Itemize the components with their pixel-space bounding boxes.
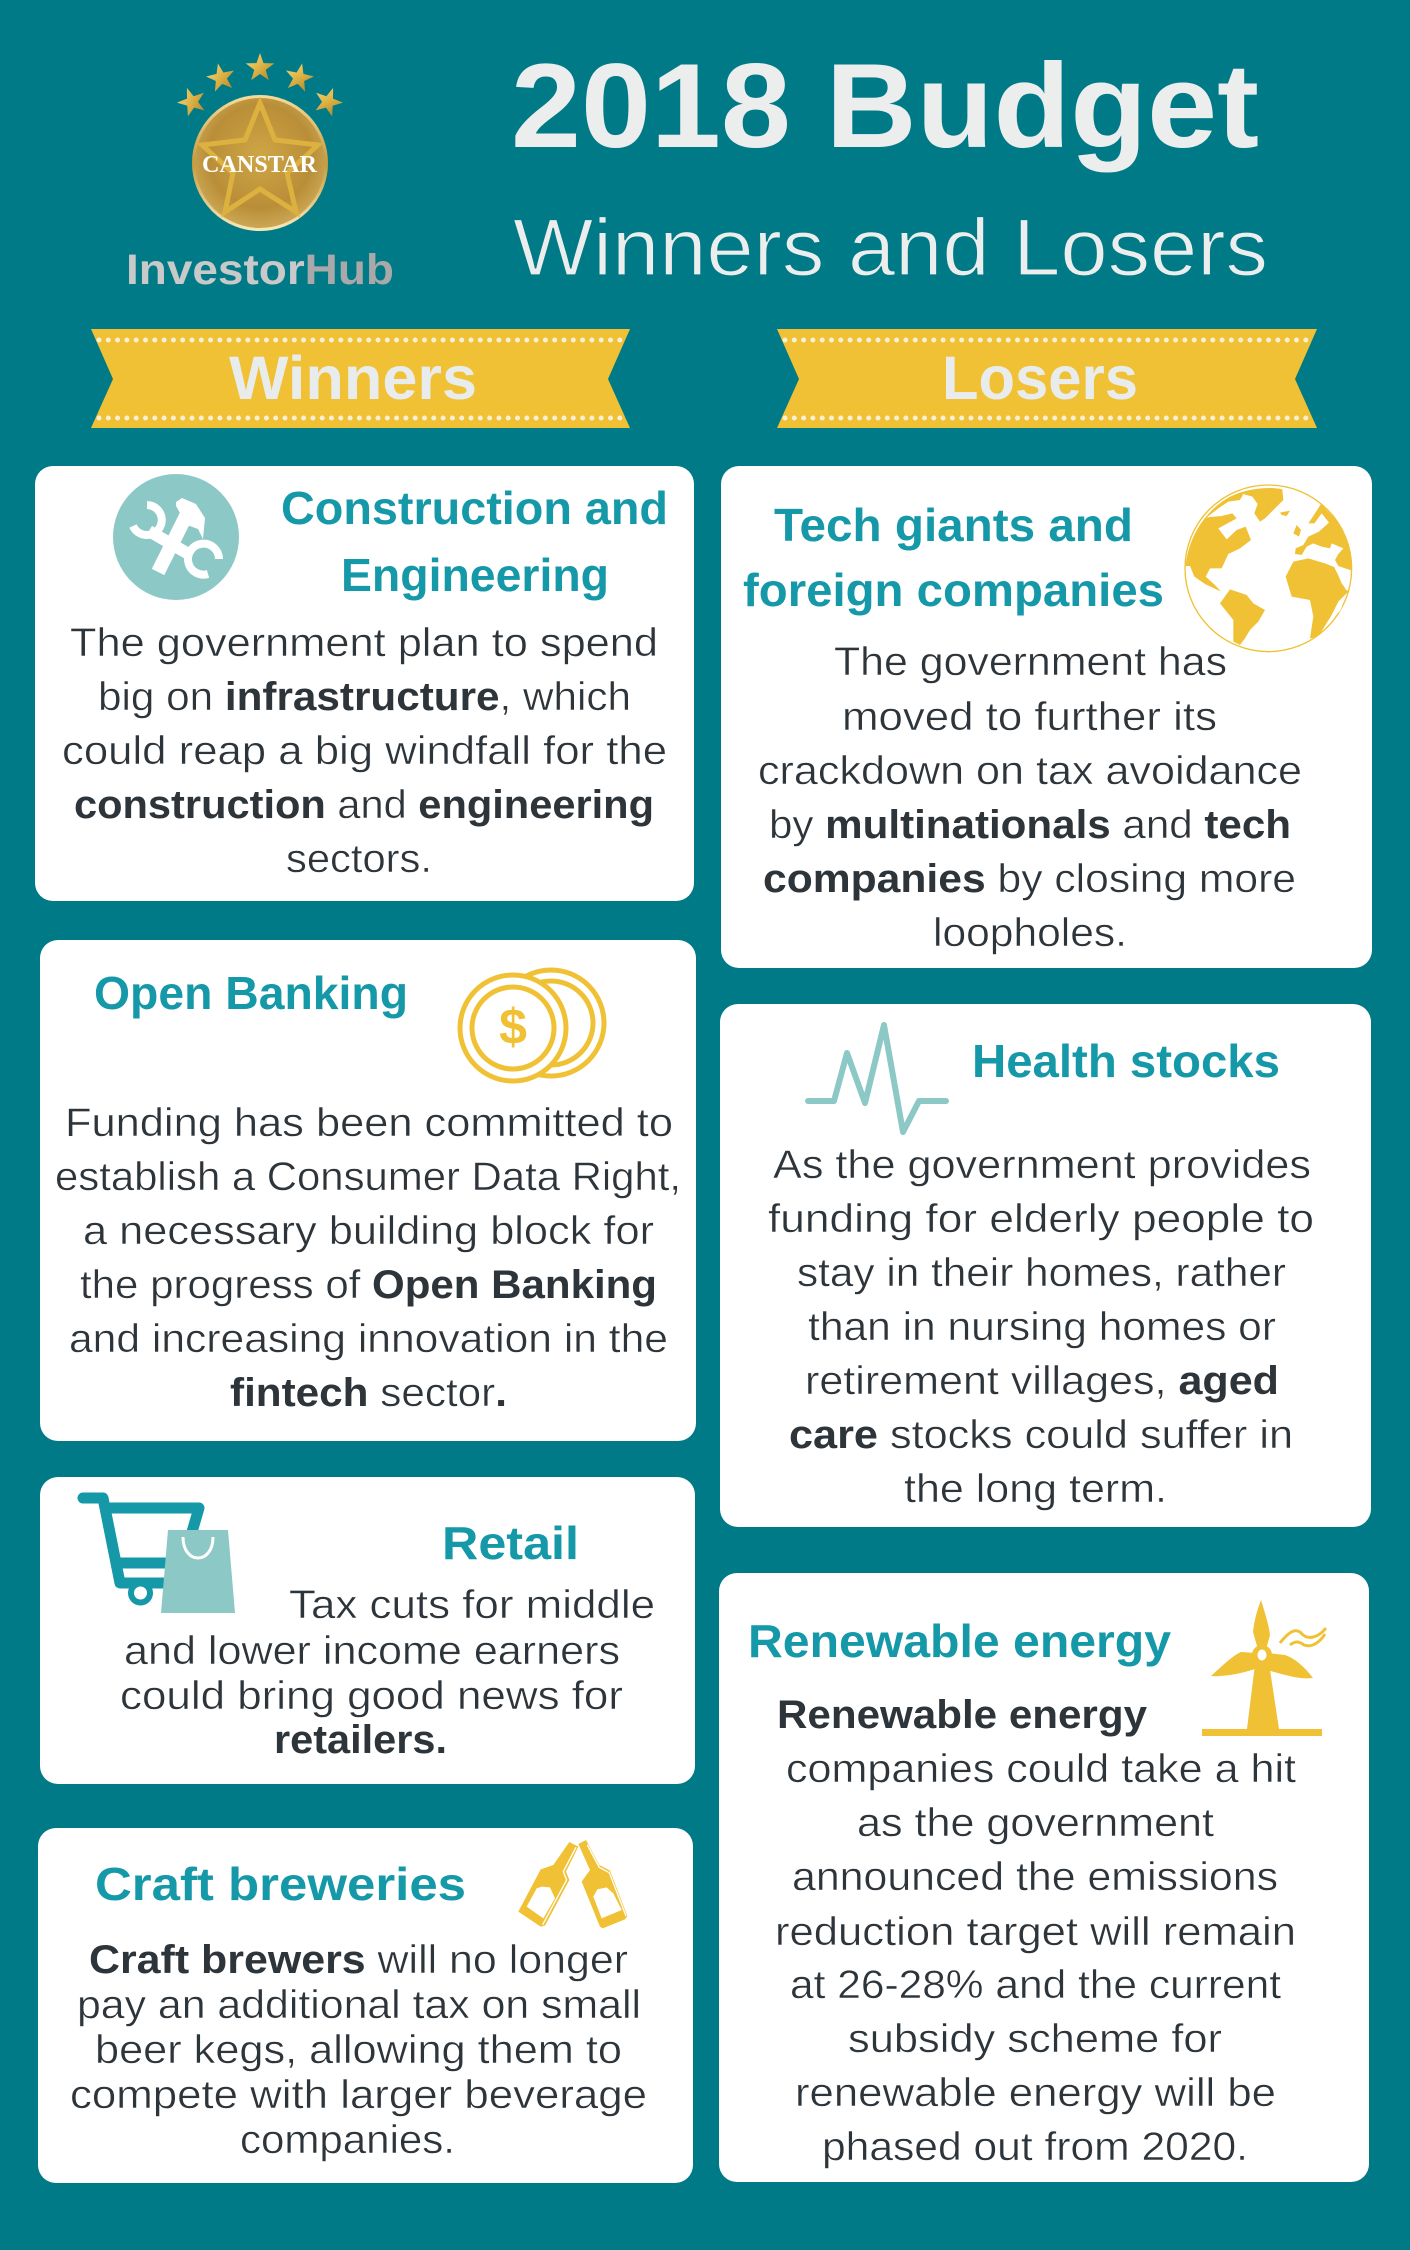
body text: Renewable energy	[777, 1693, 1148, 1737]
body text: construction and engineering	[74, 783, 654, 827]
icon: coins	[460, 970, 604, 1081]
icon: coins: $	[499, 999, 527, 1055]
body text: subsidy scheme for	[848, 2017, 1222, 2061]
icon: gold coin	[194, 96, 326, 230]
heading: Craft breweries	[95, 1858, 466, 1910]
body text: retirement villages, aged	[805, 1359, 1279, 1403]
heading: Construction and	[281, 482, 668, 534]
panel: Open Banking	[40, 940, 696, 1441]
heading: Open Banking	[94, 967, 408, 1019]
panel: Renewable energy	[719, 1573, 1369, 2182]
panel: Health stocks	[720, 1004, 1371, 1527]
body text: sectors.	[286, 837, 432, 881]
icon: heartbeat line	[808, 1025, 946, 1132]
panel: Craft breweries	[38, 1828, 693, 2183]
body text: Tax cuts for middle	[289, 1583, 655, 1627]
banner: Losers: Losers	[942, 344, 1138, 412]
body text: companies could take a hit	[786, 1747, 1296, 1791]
body text: big on infrastructure , which	[98, 675, 631, 719]
body text: and increasing innovation in the	[69, 1317, 668, 1361]
body text: pay an additional tax on small	[77, 1983, 641, 2027]
body text	[758, 640, 1302, 955]
InvestorHub wordmark: Investor Hub	[126, 246, 394, 294]
body text: fintech sector.	[230, 1371, 507, 1415]
body text: companies by closing more	[763, 857, 1296, 901]
body text: a necessary building block for	[83, 1209, 654, 1253]
body text: stay in their homes, rather	[797, 1251, 1286, 1295]
body text: the progress of Open Banking	[80, 1263, 657, 1307]
panel: Tech giants and foreign companies	[721, 466, 1372, 968]
body text: at 26-28% and the current	[790, 1963, 1281, 2007]
heading: Tech giants and	[774, 499, 1133, 551]
body text: establish a Consumer Data Right,	[55, 1155, 681, 1199]
icon: wind turbine	[1202, 1600, 1326, 1736]
body text: announced the emissions	[792, 1855, 1278, 1899]
body text: As the government provides	[773, 1143, 1311, 1187]
heading: Health stocks	[972, 1035, 1280, 1087]
CANSTAR wordmark: CANSTAR	[202, 152, 318, 178]
body text: The government has	[834, 640, 1227, 684]
body text: care stocks could suffer in	[789, 1413, 1293, 1457]
panel: Retail	[40, 1477, 695, 1784]
body text: the long term.	[904, 1467, 1167, 1511]
body text: and lower income earners	[124, 1629, 620, 1673]
body text: moved to further its	[842, 695, 1217, 739]
icon: wrench and hammer	[113, 474, 239, 600]
title: 2018 Budget	[511, 39, 1259, 173]
body text: crackdown on tax avoidance	[758, 749, 1302, 793]
body text: reduction target will remain	[775, 1910, 1296, 1954]
logo: Canstar InvestorHub	[126, 53, 394, 294]
heading: Renewable energy	[748, 1615, 1171, 1667]
heading	[743, 499, 1164, 616]
body text: Craft brewers will no longer	[89, 1938, 628, 1982]
body text	[70, 1938, 647, 2162]
heading: Retail	[442, 1517, 579, 1569]
heading	[281, 482, 668, 601]
body text: funding for elderly people to	[768, 1197, 1314, 1241]
banner: Losers	[777, 329, 1317, 428]
body text	[55, 1101, 681, 1415]
icon: shopping cart and bag	[83, 1498, 235, 1613]
body text: companies.	[240, 2118, 455, 2162]
body text: compete with larger beverage	[70, 2073, 647, 2117]
body text	[775, 1693, 1296, 2169]
subtitle: Winners and Losers	[513, 203, 1268, 293]
panel: Construction and Engineering	[35, 466, 694, 901]
body text	[120, 1583, 655, 1762]
body text: by multinationals and tech	[769, 803, 1291, 847]
body text: than in nursing homes or	[808, 1305, 1276, 1349]
body text: could reap a big windfall for the	[62, 729, 667, 773]
icon: five stars	[173, 53, 347, 118]
banner: Winners	[91, 329, 630, 428]
heading: foreign companies	[743, 564, 1164, 616]
icon: globe	[1185, 485, 1355, 652]
body text: loopholes.	[933, 911, 1127, 955]
body text	[62, 621, 667, 881]
body text: as the government	[857, 1801, 1214, 1845]
body text: retailers.	[274, 1718, 447, 1762]
body text: The government plan to spend	[70, 621, 658, 665]
icon: beer bottles	[518, 1840, 627, 1928]
banner: Winners: Winners	[229, 344, 477, 412]
heading: Engineering	[341, 549, 609, 601]
body text: renewable energy will be	[795, 2071, 1276, 2115]
body text: phased out from 2020.	[822, 2125, 1248, 2169]
body text: Funding has been committed to	[65, 1101, 673, 1145]
body text: could bring good news for	[120, 1674, 623, 1718]
body text: beer kegs, allowing them to	[95, 2028, 622, 2072]
body text	[768, 1143, 1314, 1511]
